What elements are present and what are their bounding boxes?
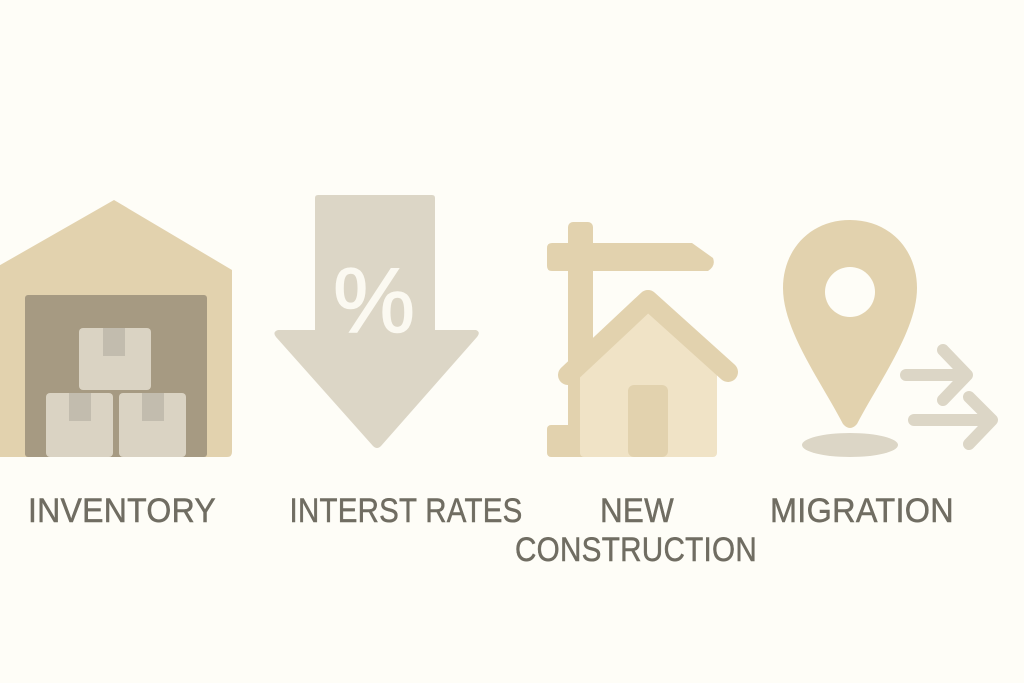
label: inventory: INVENTORY	[28, 492, 216, 530]
icon: down arrow with percent: %	[333, 250, 415, 352]
icon: location pin with arrows	[783, 220, 992, 457]
label: migration: MIGRATION	[770, 492, 954, 530]
label: new construction	[515, 492, 757, 569]
icon: down arrow with percent	[274, 195, 479, 448]
label: new construction: NEW	[600, 492, 674, 530]
icon: boxes	[46, 328, 186, 457]
arrows	[906, 350, 992, 444]
icon: warehouse	[0, 200, 232, 457]
icon: crane and house	[547, 222, 728, 457]
label: new construction: CONSTRUCTION	[515, 531, 757, 569]
label: interest rates: INTERST RATES	[290, 492, 522, 530]
